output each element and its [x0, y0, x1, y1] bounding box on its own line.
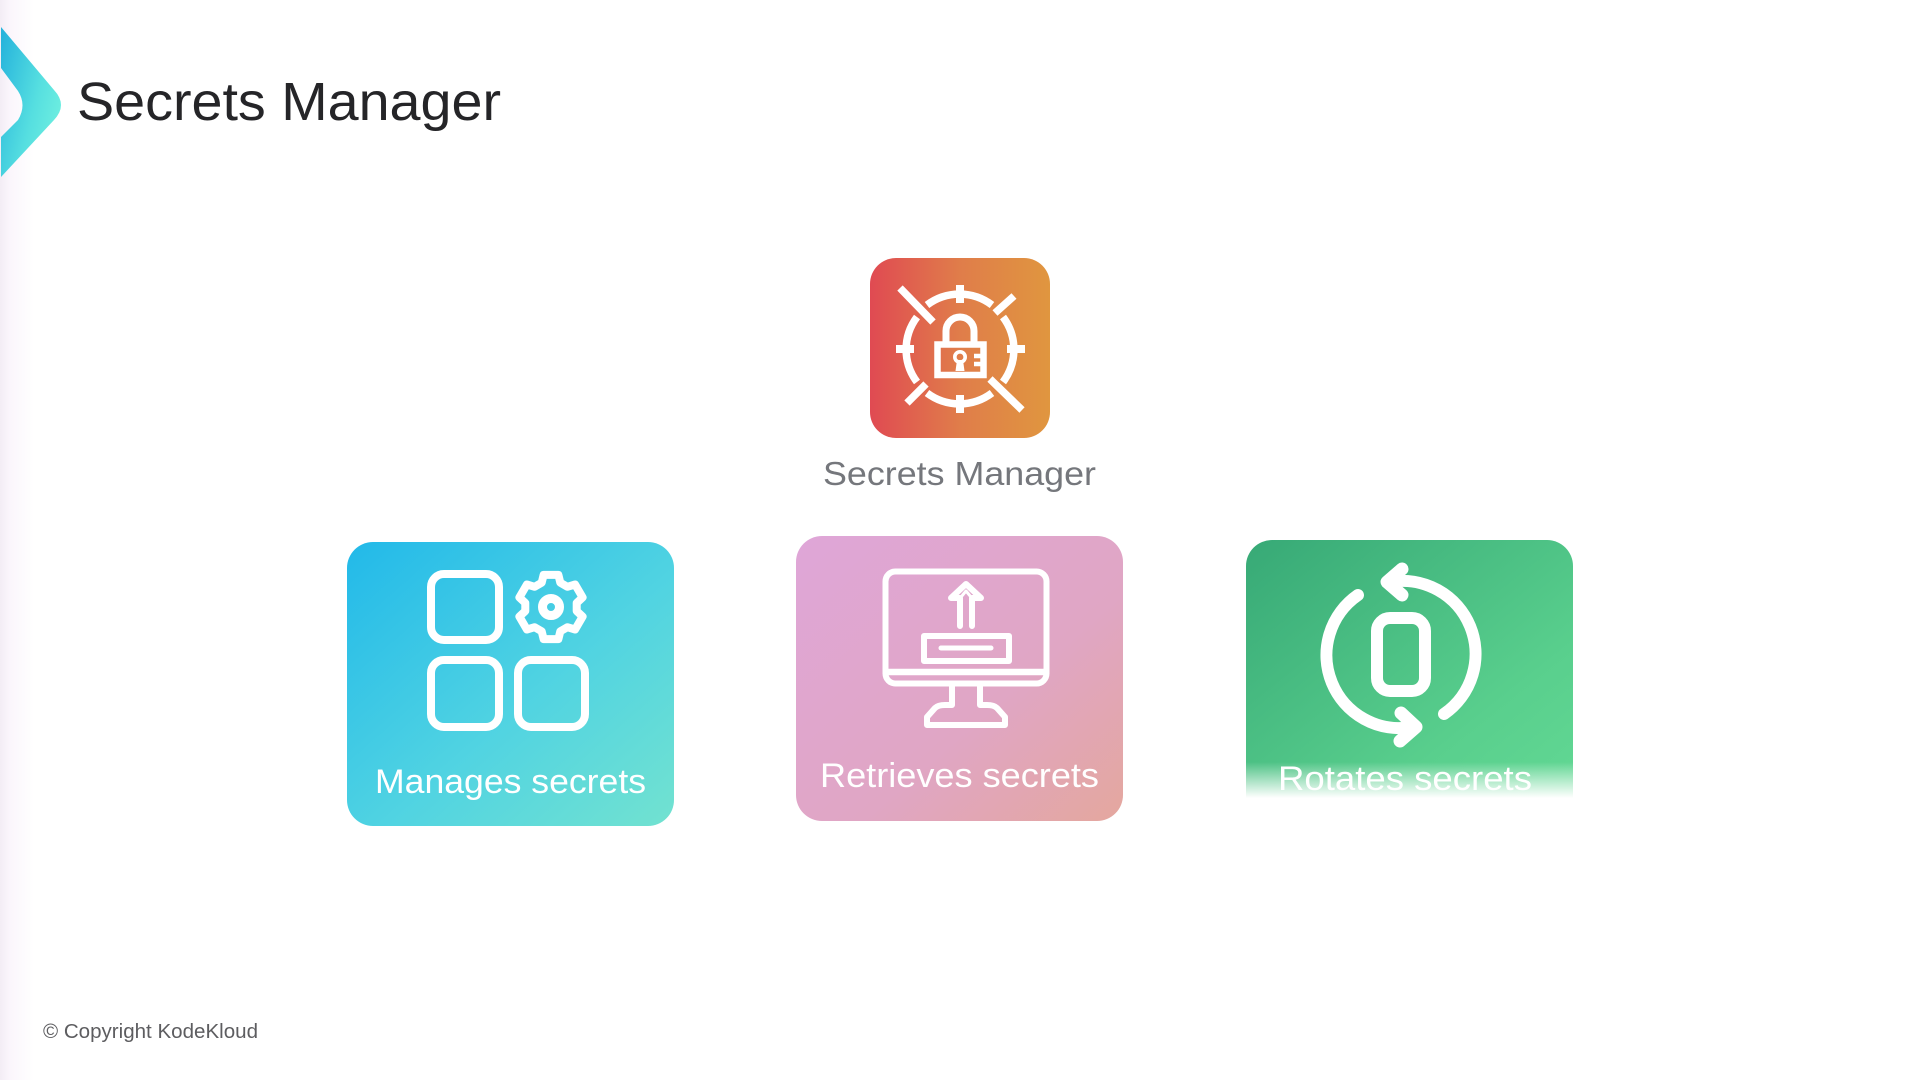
icon: secrets manager app tile: [870, 258, 1050, 438]
icon: monitor with upload arrow: [886, 572, 1046, 725]
card label: Rotates secrets: [1278, 760, 1532, 798]
icon: grid with gear: [431, 574, 585, 727]
card label: Manages secrets: [375, 763, 646, 801]
copyright footer: © Copyright KodeKloud: [43, 1021, 258, 1043]
app label: Secrets Manager: [823, 455, 1096, 492]
icon: rotation arrows around device: [1326, 569, 1476, 741]
panel: rotates secrets: [1246, 540, 1573, 800]
panel: retrieves secrets: [796, 536, 1123, 821]
panel: manages secrets: [347, 542, 674, 826]
icon: header chevron: [1, 27, 61, 177]
card label: Retrieves secrets: [820, 757, 1099, 795]
title: Secrets Manager: [77, 72, 501, 132]
